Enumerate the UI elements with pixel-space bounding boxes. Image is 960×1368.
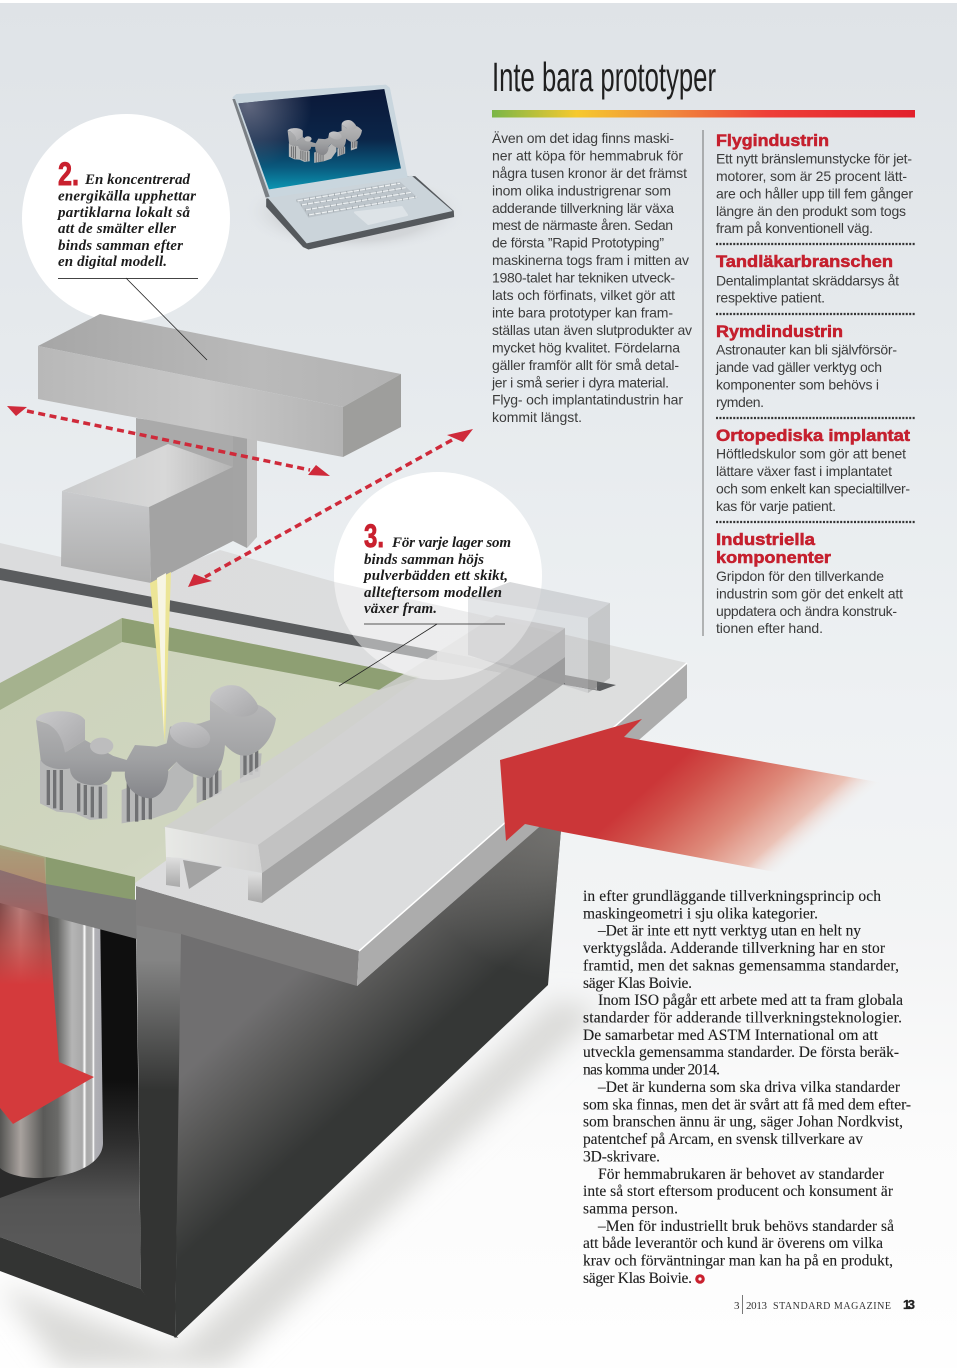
item: Flygindustrin: are och håller upp till fem gånger [716,186,913,202]
number 2: 2. [58,156,79,192]
callout 2: text: att de smälter eller [58,221,176,237]
article body text: standarder för adderande tillverkningsteknologier. [583,1010,902,1026]
article body text: För hemmabrukaren är behovet av standarder [598,1166,885,1183]
callout 2: text: energikälla upphettar [58,188,196,204]
item: Flygindustrin [716,131,913,236]
intro text column: jer i små serier i dyra material. [491,374,669,390]
frame bottom strip [0,1237,178,1338]
column divider [702,130,704,636]
item: Ortopediska implantat: Höftledskulor som gör att benet [716,446,906,462]
intro text column: mycket hög kvalitet. Fördelarna [492,339,680,355]
gradient title bar [492,110,915,118]
item: Rymdindustrin: jande vad gäller verktyg och [715,359,882,375]
industries column [715,131,915,636]
callout 3: text: För varje lager som [391,535,511,551]
article body text: samma person. [583,1200,678,1218]
item: Ortopediska implantat: lättare växer fast i implantatet [716,463,892,479]
cabinet ground shadow [0,1000,600,1368]
article body text: verktygslåda. Adderande tillverkning har en stor [583,940,886,957]
item: Industriella komponenter: komponenter [716,548,831,567]
item: Tandläkarbranschen: Tandläkarbranschen [716,252,893,271]
intro text column: 1980-talet har tekniken utveck- [492,270,675,286]
red arrow: pointing right into build chamber [0,848,94,1124]
item: Industriella komponenter: Gripdon för den tillverkande [716,568,884,584]
footer folio: 2013 [746,1300,768,1312]
3D printed dental model [36,685,276,823]
cabinet interior [0,890,141,1289]
item: Tandläkarbranschen: Dentalimplantat skräddarsys åt [716,272,899,288]
item: Industriella komponenter: uppdatera och ändra konstruk- [716,603,897,619]
callout 3: text [362,518,511,617]
article body text: utveckla gemensamma standarder. De första beräk- [583,1044,899,1061]
red arrow: pointing left into powder bed [500,719,883,873]
article body text: nas komma under 2014. [583,1062,720,1079]
callout 2: text [56,156,196,270]
intro text column: Även om det idag finns maski- [492,130,674,146]
article body text: patentchef på Arcam, en svensk tillverkare av [583,1131,863,1148]
crown bodies [36,700,276,798]
bed front lip [46,857,135,900]
article body text: som ska finnas, men det är svårt att få med dem efter- [583,1096,911,1113]
item: Rymdindustrin: Rymdindustrin [716,322,843,341]
article body text: att både leverantör och kund är överens om vilka [583,1235,883,1252]
item: Rymdindustrin: komponenter som behövs i [716,376,879,392]
intro text column: kommit längst. [492,409,582,425]
item: Tandläkarbranschen: respektive patient. [716,290,825,306]
dashed arrow: print head y axis [188,429,473,587]
item: Flygindustrin: motorer, som är 25 procent lätt- [716,168,907,184]
bed back wall [122,618,420,690]
intro text column: de första ”Rapid Prototyping” [492,235,664,251]
head box top [62,444,233,507]
item: Ortopediska implantat: Ortopediska implantat [716,426,910,445]
plate side [357,663,687,986]
item: Rymdindustrin [715,322,897,410]
steel piston cylinder [0,885,103,1178]
front lip under plate [136,886,359,986]
item: Flygindustrin: fram på konventionell väg. [716,220,873,236]
callout bubble 2 background [22,114,230,322]
article body text: säger Klas Boivie. [583,975,692,992]
front pillar [136,886,182,1338]
print head assembly [61,418,257,583]
recoater legs [166,857,180,887]
item: Ortopediska implantat [716,426,910,514]
item: Industriella komponenter: industrin som gör det enkelt att [716,586,903,602]
article body text: som branschen ännu är ung, säger Johan Nordkvist, [583,1114,903,1131]
slot rail [0,568,616,691]
bar front face [165,827,262,873]
intro text column: Flyg- och implantatindustrin har [492,392,683,408]
dashed arrow: print head x axis [7,406,330,476]
article body text: Inom ISO pågår ett arbete med att ta fram globala [598,992,903,1009]
article body text: säger Klas Boivie. [583,1270,692,1287]
article body text: –Det är inte ett nytt verktyg utan en helt ny [597,923,861,940]
callout 3: text: pulverbädden ett skikt, [362,568,508,584]
item: Flygindustrin: Ett nytt bränslemunstycke för jet- [716,150,912,166]
callout 3: text: växer fram. [364,601,437,617]
article body text: inte så stort eftersom producent och konsument är [583,1183,894,1200]
support blocks [40,760,107,820]
head box side [149,467,233,583]
item: Rymdindustrin: rymden. [716,394,764,410]
recoater bar [163,615,565,903]
intro text column: några tusen kronor är det främst [492,165,687,181]
head box front [61,491,151,583]
machine base: cabinet [0,806,600,1368]
item: Rymdindustrin: Astronauter kan bli självförsör- [716,342,897,358]
intro text column [491,130,692,425]
callout 3: text: binds samman höjs [364,552,484,568]
article body text: –Men för industriellt bruk behövs standarder så [597,1218,894,1235]
callout 3: text: allteftersom modellen [364,585,502,601]
article body text [583,888,911,1287]
intro text column: inte bara prototyper kan fram- [492,304,673,320]
article body text: maskingeometri i sju olika kategorier. [583,905,818,922]
bed left wall [0,618,122,710]
stem [136,418,233,541]
crown caps [36,711,85,753]
item: Flygindustrin: Flygindustrin [716,131,829,150]
item: Tandläkarbranschen [716,252,899,306]
callout 2: text: partiklarna lokalt så [56,205,190,221]
frame top strip [0,868,137,939]
intro text column: gäller framför allt för små detal- [492,357,679,373]
callout 3: rule and pointer [339,624,505,686]
footer folio: 3 [734,1300,740,1312]
article body text: –Det är kunderna som ska driva vilka standarder [597,1079,901,1096]
footer folio: 13 [903,1297,915,1312]
icon: laptop showing digital model [232,86,467,253]
callout 2: rule and pointer [58,278,207,360]
cabinet right side panel [175,806,563,1338]
bar side faces [258,628,565,873]
article body text: framtid, men det saknas gemensamma standarder, [583,957,899,974]
intro text column: inom olika industrigrenar som [492,182,671,198]
item: Industriella komponenter [716,530,903,636]
intro text column: ner att köpa för hemmabruk för [492,147,683,163]
support stripes [48,735,257,822]
footer folio: STANDARD MAGAZINE [773,1301,891,1312]
intro text column: lats och förfinats, vilket gör att [492,287,675,303]
icon: end-of-article bullet [695,1274,705,1284]
intro text column: ställas utan även slutprodukter av [492,322,692,338]
intro text column: adderande tillverkning lär växa [492,200,674,216]
article body text: De samarbetar med ASTM International om att [583,1027,879,1044]
top plate [0,543,687,986]
footer folio [734,1295,915,1314]
item: Industriella komponenter: tionen efter hand. [716,620,823,636]
item: Flygindustrin: längre än den produkt som togs [716,203,906,219]
intro text column: mest de närmaste åren. Sedan [492,217,673,233]
laser beam [150,572,171,743]
item: Ortopediska implantat: och som enkelt kan specialtillver- [716,480,910,496]
callout 2: text: En koncentrerad [84,172,190,188]
bar top face [163,615,565,847]
recoater dark gap [183,860,222,889]
item: Industriella komponenter: Industriella [716,530,816,549]
callout bubble 3 background [334,472,610,693]
article body text: in efter grundläggande tillverkningsprincip och [583,888,881,905]
beam [38,314,401,457]
callout 2: text: binds samman efter [58,238,183,254]
article body text: 3D-skrivare. [583,1148,660,1165]
translucent rear frame [468,582,610,618]
article body text: krav och förväntningar man kan ha på en produkt, [583,1253,893,1270]
powder bed [0,618,420,900]
item: Ortopediska implantat: kas för varje patient. [716,498,836,514]
number 3: 3. [364,518,384,554]
callout 2: text: en digital modell. [58,254,167,270]
title: Inte bara prototyper [492,54,716,100]
intro text column: maskinerna togs fram i mitten av [492,252,689,268]
